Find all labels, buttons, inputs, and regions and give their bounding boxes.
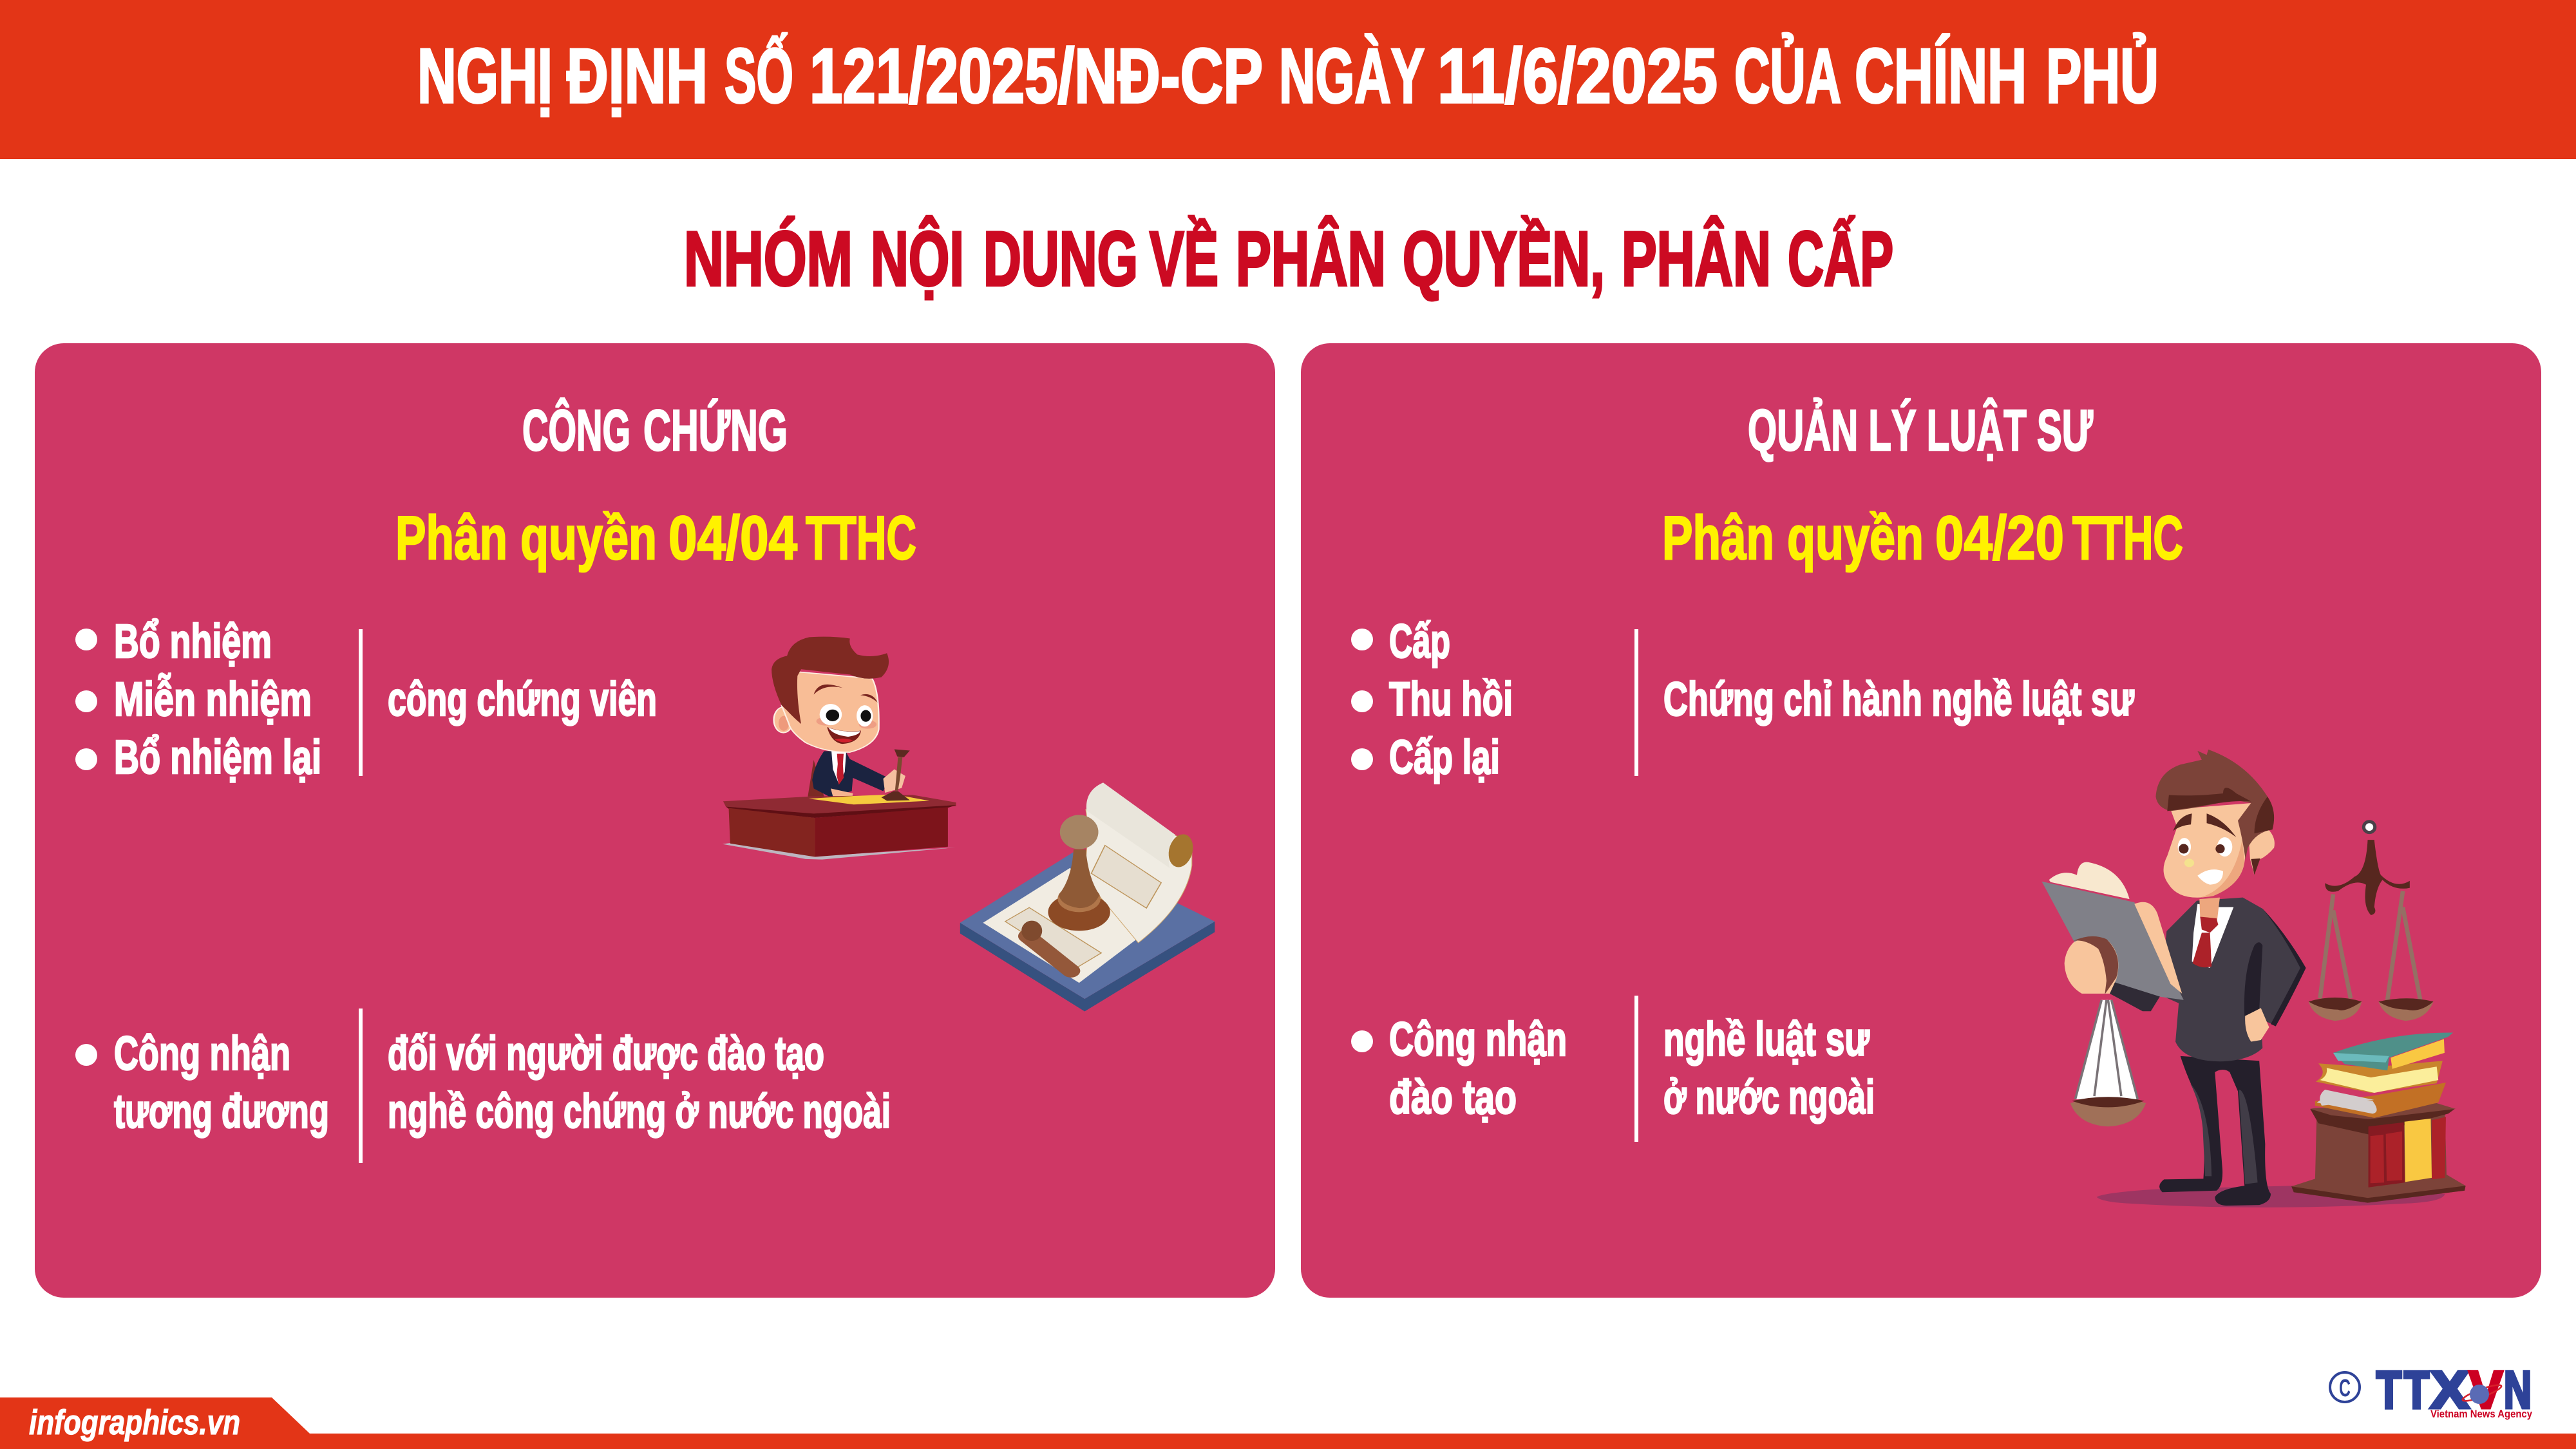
panel heading: quản lý luật sư: QUẢN LÝ LUẬT SƯ	[1748, 397, 2093, 463]
title: 121/2025/NĐ-CP	[810, 33, 1263, 119]
title: CHÍNH	[1855, 33, 2027, 119]
decentralization count: 04/20: 04/20	[1935, 504, 2064, 573]
text: trained abroad: đối với người được đào tạo	[388, 1027, 824, 1080]
list: appointment actions: Miễn nhiệm	[114, 672, 312, 726]
decentralization count: 04/04: 04/04	[668, 504, 797, 573]
panel heading: công chứng: CHỨNG	[643, 398, 788, 463]
list: training recognition	[1351, 1012, 1567, 1124]
subtitle heading: QUYỀN,	[1403, 216, 1605, 302]
title: NGÀY	[1279, 33, 1425, 119]
panel: công chứng	[35, 343, 1275, 1298]
decentralization count: 04/04	[395, 504, 916, 573]
title: SỐ	[724, 33, 793, 119]
list: appointment actions	[75, 614, 321, 784]
footer website: infographics.vn	[29, 1403, 240, 1442]
logo: TTXVN: X	[2430, 1361, 2469, 1419]
title: CỦA	[1734, 32, 1841, 119]
logo: TTXVN: C	[2339, 1375, 2351, 1402]
text: trained abroad	[388, 1027, 891, 1138]
subtitle heading: NỘI	[871, 216, 964, 302]
list: equivalence recognition: Công nhận	[114, 1027, 290, 1080]
subtitle heading: NHÓM	[684, 216, 853, 302]
logo: TTXVN: T	[2404, 1361, 2429, 1419]
text: lawyer profession abroad: ở nước ngoài	[1663, 1070, 1875, 1124]
subtitle heading	[684, 216, 1893, 302]
list: appointment actions: Bổ nhiệm	[114, 614, 272, 668]
logo: TTXVN: T	[2376, 1361, 2401, 1419]
text: notary: công chứng viên	[388, 672, 657, 726]
header band	[0, 0, 2576, 159]
list: certificate actions	[1351, 614, 1513, 784]
decentralization count: 04/04: Phân	[395, 504, 507, 573]
panel heading: công chứng	[522, 397, 788, 463]
panel heading: công chứng: CÔNG	[522, 397, 630, 463]
list: training recognition: đào tạo	[1389, 1070, 1517, 1124]
subtitle heading: CẤP	[1788, 216, 1893, 302]
list: equivalence recognition	[75, 1027, 329, 1138]
decentralization count: 04/20: TTHC	[2072, 504, 2183, 573]
illustration: notary at desk	[723, 637, 956, 860]
logo: TTXVN	[2330, 1361, 2532, 1420]
subtitle heading: VỀ	[1150, 216, 1218, 302]
logo: TTXVN: V	[2469, 1361, 2503, 1419]
subtitle heading: DUNG	[983, 216, 1138, 302]
subtitle heading: PHÂN	[1622, 216, 1771, 302]
title: 11/6/2025	[1437, 33, 1718, 119]
decentralization count: 04/04: TTHC	[806, 504, 916, 573]
decentralization count: 04/04: quyền	[520, 504, 657, 573]
illustration: lawyer with scales and books	[2041, 750, 2466, 1208]
text: lawyer profession abroad	[1663, 1012, 1875, 1124]
text: practice certificate: Chứng chỉ hành nghề luật sư	[1663, 672, 2134, 726]
list: training recognition: Công nhận	[1389, 1012, 1567, 1066]
title: NGHỊ	[417, 33, 553, 119]
subtitle heading: PHÂN	[1236, 216, 1386, 302]
list: equivalence recognition: tương đương	[114, 1084, 329, 1138]
decentralization count: 04/20	[1662, 504, 2183, 573]
illustration: stamp and scroll	[960, 782, 1215, 1012]
list: certificate actions: Cấp lại	[1389, 730, 1500, 784]
title	[417, 32, 2159, 119]
logo: TTXVN: Vietnam News Agency	[2430, 1408, 2532, 1420]
footer bar with tab	[0, 1397, 2576, 1449]
list: certificate actions: Thu hồi	[1389, 672, 1513, 726]
panel: quản lý luật sư	[1301, 343, 2541, 1298]
decentralization count: 04/20: Phân	[1662, 504, 1774, 573]
decentralization count: 04/20: quyền	[1787, 504, 1924, 573]
title: PHỦ	[2046, 32, 2159, 119]
title: ĐỊNH	[567, 33, 708, 119]
text: trained abroad: nghề công chứng ở nước ngoài	[388, 1084, 891, 1138]
list: certificate actions: Cấp	[1389, 614, 1450, 668]
text: lawyer profession abroad: nghề luật sư	[1663, 1012, 1870, 1066]
logo: TTXVN: N	[2504, 1361, 2532, 1419]
list: appointment actions: Bổ nhiệm lại	[114, 730, 321, 784]
